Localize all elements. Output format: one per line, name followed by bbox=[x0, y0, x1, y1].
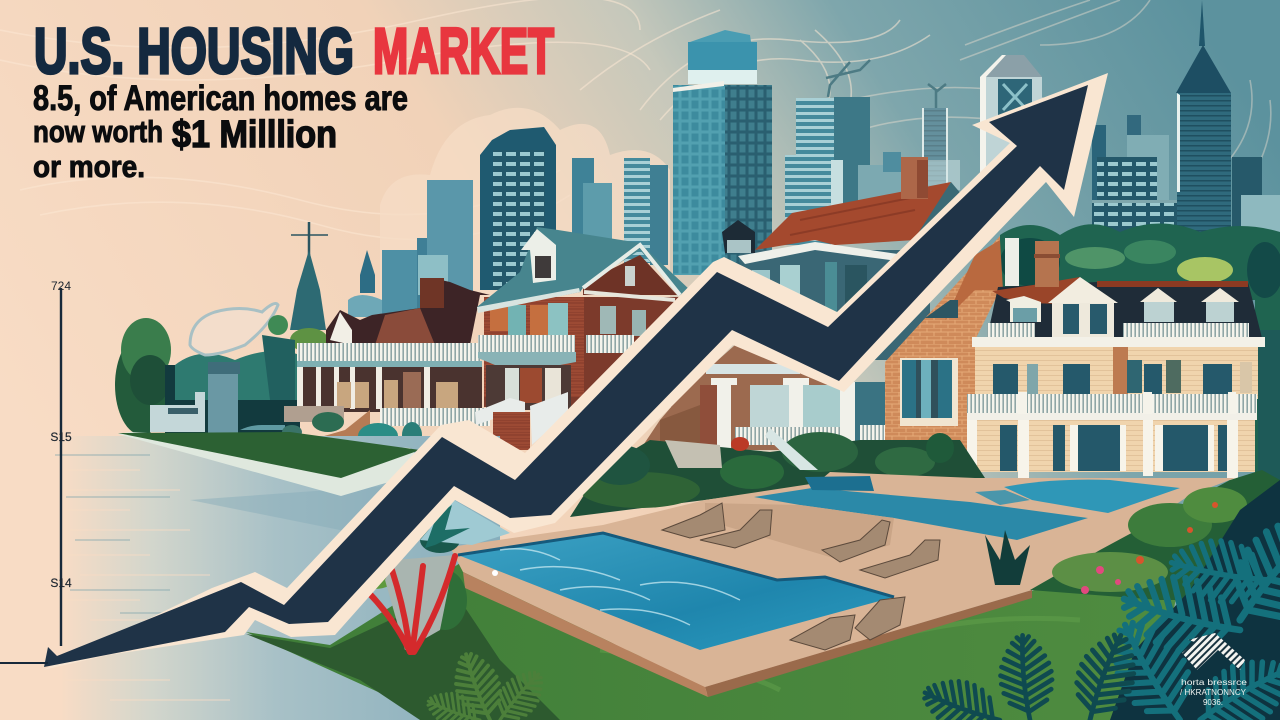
roof bbox=[987, 282, 1262, 338]
building: dark tower bbox=[480, 127, 556, 290]
building: small domed tower bbox=[348, 250, 382, 317]
cupola bbox=[722, 220, 755, 253]
entry stairs bbox=[475, 398, 525, 425]
wall and porch bbox=[740, 250, 930, 360]
foliage bed on right bbox=[985, 470, 1280, 600]
lattice stairs bbox=[665, 440, 722, 468]
teal plant behind arrow gap bbox=[420, 500, 510, 548]
icon: house chevron logo bbox=[1182, 633, 1245, 670]
left village bbox=[115, 222, 328, 435]
subheading text: or more. bbox=[33, 149, 145, 184]
pool two bbox=[754, 488, 1088, 540]
gable bbox=[583, 255, 677, 295]
palm fronds: bottom right bbox=[917, 480, 1280, 720]
icon: rooftop sculptures bbox=[826, 60, 946, 110]
treeline behind right mansion bbox=[1000, 224, 1280, 480]
logo badge bottom right bbox=[1180, 633, 1248, 707]
building: spire skyscraper bbox=[1176, 0, 1231, 243]
foreground shore foliage and red plant bbox=[246, 527, 560, 720]
chimney bbox=[901, 157, 928, 199]
heading: U.S. HOUSING bbox=[34, 15, 354, 87]
icon: church steeple bbox=[262, 222, 328, 400]
building: brick house with teal roof bbox=[475, 227, 690, 450]
red roof bbox=[755, 182, 951, 250]
leaves behind plant bbox=[420, 527, 460, 553]
building: porch under the arrow bbox=[640, 345, 886, 452]
skyline: distant buildings bbox=[348, 0, 1280, 317]
peach clouds bbox=[380, 108, 670, 300]
upper windows bbox=[993, 364, 1232, 394]
arrow: rising zigzag chart line bbox=[43, 73, 1108, 670]
island lawn with concrete edge bbox=[118, 432, 430, 496]
attic rails bbox=[987, 323, 1035, 337]
tree: large green tree bbox=[115, 318, 300, 435]
teal roof bbox=[477, 227, 690, 312]
logo text: 9036. bbox=[1203, 698, 1223, 707]
building: twin towers bbox=[572, 158, 668, 265]
axis label: S14 bbox=[50, 576, 72, 590]
columns and doors bbox=[297, 367, 430, 409]
dormers bbox=[1006, 288, 1239, 322]
axis label: 724 bbox=[51, 279, 71, 293]
arrow: cream outline bbox=[43, 73, 1108, 670]
subheading text: 8.5, of American homes are bbox=[33, 79, 408, 118]
building: city block on right bbox=[1092, 115, 1280, 242]
cloud: white puff bbox=[190, 304, 278, 355]
logo text bbox=[1180, 678, 1248, 707]
building: striped slim tower bbox=[922, 108, 960, 190]
heading: MARKET bbox=[373, 15, 554, 87]
upper balcony rail bbox=[297, 343, 480, 363]
subheading text: now worth bbox=[33, 114, 163, 149]
building: lower left colonial house bbox=[282, 278, 490, 452]
ground floor bbox=[975, 420, 1255, 472]
cornice bbox=[972, 337, 1265, 347]
balcony bbox=[967, 394, 1257, 413]
shrubs bbox=[312, 412, 344, 432]
water: lake on the left bbox=[0, 436, 500, 720]
pool three bbox=[1004, 480, 1180, 513]
loungers on terrace bbox=[662, 503, 940, 650]
subheading text bbox=[33, 79, 408, 184]
icon: red plant bbox=[368, 556, 455, 652]
beige terrace bbox=[450, 472, 1235, 687]
logo text: / HKRATNONNCY bbox=[1180, 688, 1247, 697]
terrace and upper pools bbox=[450, 472, 1235, 697]
building: right mid towers bbox=[785, 97, 902, 245]
icon: vintage cars and water tower bbox=[150, 362, 285, 435]
building: brick wing bbox=[885, 236, 1019, 470]
subheading text: $1 Milllion bbox=[172, 114, 337, 156]
axis label: S15 bbox=[50, 430, 72, 444]
lawn in foreground bbox=[246, 560, 1180, 720]
cream wall bbox=[975, 347, 1258, 399]
roof bbox=[326, 278, 490, 345]
dormer bbox=[521, 229, 556, 283]
logo text: horta bressrce bbox=[1181, 678, 1248, 687]
building: main glass tower bbox=[673, 30, 772, 275]
central gable bbox=[1048, 277, 1118, 303]
pool: main swimming pool bbox=[458, 533, 894, 650]
building: left cluster bbox=[382, 180, 473, 315]
building: white tower with emblem bbox=[980, 55, 1042, 177]
decorative sky swirls and clouds bbox=[0, 0, 1271, 240]
title block bbox=[33, 15, 554, 184]
building: middle house with red roof bbox=[722, 157, 962, 360]
y axis with garbled labels bbox=[0, 279, 72, 663]
raised wall bbox=[705, 503, 894, 560]
building: right cream mansion bbox=[967, 241, 1265, 480]
chimney bbox=[1035, 241, 1059, 287]
columns bbox=[967, 420, 1238, 480]
balconies bbox=[478, 335, 575, 353]
wall bbox=[484, 297, 679, 407]
porch wall bbox=[297, 362, 482, 412]
stairs bbox=[293, 410, 370, 452]
lower rail bbox=[380, 408, 490, 426]
garden beds behind terrace bbox=[570, 428, 985, 517]
lower door bay bbox=[486, 365, 571, 410]
arrow: navy body bbox=[44, 85, 1088, 667]
